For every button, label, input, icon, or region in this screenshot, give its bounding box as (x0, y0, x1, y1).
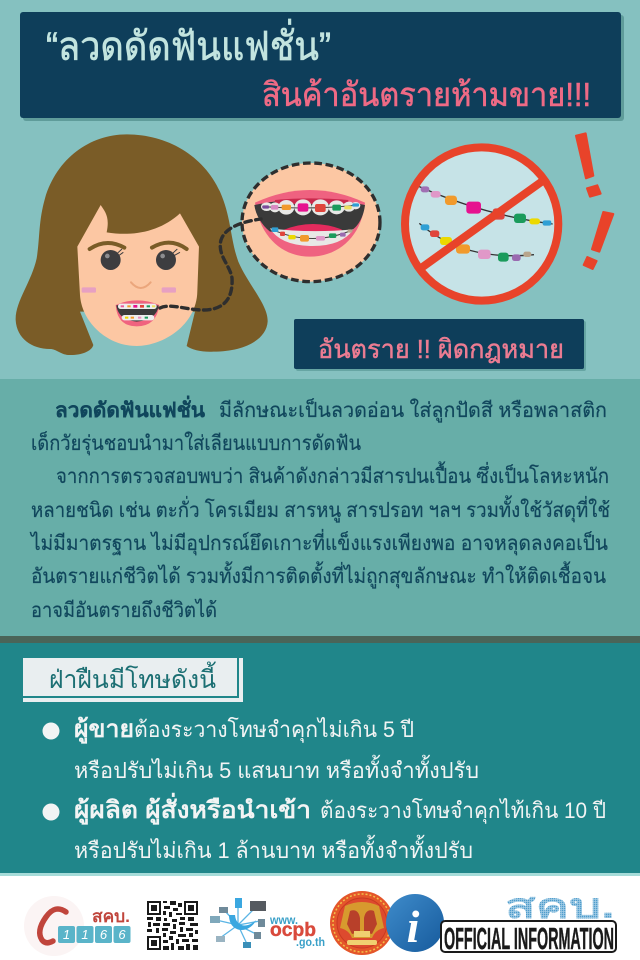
warning label (294, 319, 586, 371)
hair (16, 134, 268, 355)
bullet: seller: ผู้ขาย (74, 716, 134, 744)
upper teeth (261, 199, 360, 215)
paragraph text: อาจมีอันตรายถึงชีวิตได้ (31, 598, 217, 622)
logo: hotline 1166: 6 (118, 927, 126, 942)
logo: official information (441, 887, 616, 956)
paragraph text: เด็กวัยรุ่นชอบนำมาใส่เลียนแบบการดัดฟัน (31, 429, 361, 456)
wires (262, 205, 359, 238)
logo: ocpb website (210, 898, 325, 949)
logo: hotline 1166: สคบ. (92, 907, 130, 926)
red ring and slash (405, 147, 558, 301)
upper brackets (262, 203, 359, 212)
bullet: seller: หรือปรับไม่เกิน 5 แสนบาท หรือทั้งจำทั้งปรับ (74, 755, 479, 783)
lips (255, 190, 365, 257)
bullet: manufacturer and importer: ต้องระวางโทษจำคุกไท้เกิน 10 ปี (320, 798, 606, 824)
icon: exclamation marks (576, 133, 613, 269)
bullet: manufacturer and importer: หรือปรับไม่เกิน 1 ล้านบาท หรือทั้งจำทั้งปรับ (74, 835, 473, 863)
logo: hotline 1166 (24, 896, 130, 956)
logo: hotline 1166: 1 (81, 927, 89, 942)
penalties heading (23, 658, 243, 702)
panel: penalties (0, 643, 640, 873)
eyes (101, 249, 180, 270)
face (77, 205, 199, 346)
logo: official information: สคบ. (505, 887, 615, 926)
illustration: girl with braces (16, 134, 268, 355)
nose (131, 282, 151, 288)
prohibition sign over braces (405, 147, 558, 301)
footer (0, 873, 640, 960)
paragraph text: มีลักษณะเป็นลวดอ่อน ใส่ลูกปัดสี หรือพลาสติก (219, 396, 607, 423)
cheeks (82, 287, 176, 293)
logo: ocpb website: ocpb (270, 920, 316, 941)
QR code (147, 901, 198, 950)
upper braces wire (419, 186, 553, 226)
bullet: manufacturer and importer (42, 792, 606, 863)
divider strip (0, 636, 640, 643)
paragraph text: ไม่มีมาตรฐาน ไม่มีอุปกรณ์ยึดเกาะที่แข็งแรงเพียงพอ อาจหลุดลงคอเป็น (29, 529, 608, 556)
paragraph text: ลวดดัดฟันแฟชั่น (55, 395, 205, 422)
upper gum (275, 198, 348, 204)
logo: hotline 1166: 1 (63, 927, 70, 942)
lower brackets (272, 227, 352, 242)
panel: description (0, 379, 640, 637)
lower braces wire (419, 223, 534, 262)
eyebrows (90, 243, 187, 249)
penalties heading: ฝ่าฝืนมีโทษดังนี้ (49, 661, 216, 694)
mouth interior (254, 199, 365, 232)
dashed connector (160, 219, 261, 310)
paragraph text (29, 395, 610, 622)
paragraph text: อันตรายแก่ชีวิตได้ รวมทั้งมีการติดตั้งที่ไม่ถูกสุขลักษณะ ทำให้ติดเชื้อจน (31, 561, 606, 589)
icon: info: i (407, 901, 420, 952)
title: fashion braces: “ลวดดัดฟันแฟชั่น” (46, 19, 331, 69)
logo: ocpb website: www. (269, 913, 298, 927)
bullet: manufacturer and importer: ผู้ผลิต ผู้สั่งหรือนำเข้า (74, 792, 311, 825)
bullet: seller (42, 716, 479, 783)
seal: consumer protection board (330, 891, 394, 955)
lower teeth (270, 228, 353, 246)
small mouth (116, 300, 159, 326)
logo: ocpb website: .go.th (296, 935, 325, 949)
logo: hotline 1166: 6 (100, 927, 108, 942)
icon: info (386, 894, 444, 952)
subtitle: dangerous product: สินค้าอันตรายห้ามขาย!!! (262, 76, 591, 113)
warning label: อันตราย !! ผิดกฎหมาย (318, 334, 564, 364)
bullet: seller: ต้องระวางโทษจำคุกไม่เกิน 5 ปี (134, 717, 414, 743)
magnified mouth bubble (242, 163, 380, 282)
title banner (20, 12, 624, 121)
tongue (283, 224, 342, 233)
